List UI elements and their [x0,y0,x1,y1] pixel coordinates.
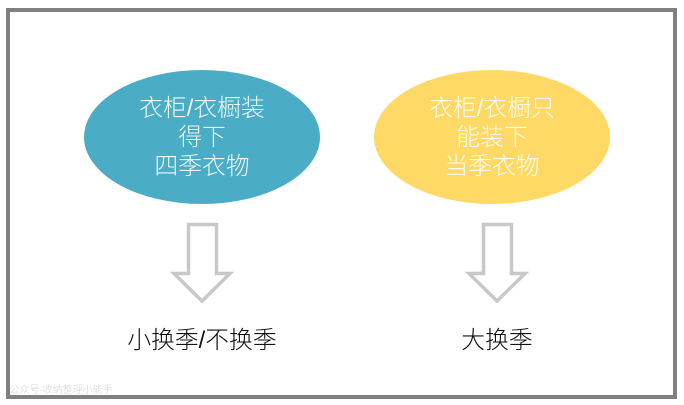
yellow ellipse: wardrobe fits current season only: 当季衣物 [444,153,540,180]
yellow ellipse: wardrobe fits current season only: 衣柜/衣橱只 [429,95,555,122]
blue ellipse: wardrobe fits all seasons [84,70,320,204]
left result label: 小换季/不换季 [127,327,277,354]
yellow ellipse: wardrobe fits current season only: 能装下 [456,124,528,151]
right down arrow [469,224,525,301]
yellow ellipse: wardrobe fits current season only [374,70,610,204]
blue ellipse: wardrobe fits all seasons: 得下 [178,124,226,151]
blue ellipse: wardrobe fits all seasons: 四季衣物 [154,153,250,180]
left down arrow [174,224,230,301]
watermark: 公众号·收纳整理小能手 [9,383,113,396]
right result label: 大换季 [461,327,533,354]
blue ellipse: wardrobe fits all seasons: 衣柜/衣橱装 [139,95,265,122]
